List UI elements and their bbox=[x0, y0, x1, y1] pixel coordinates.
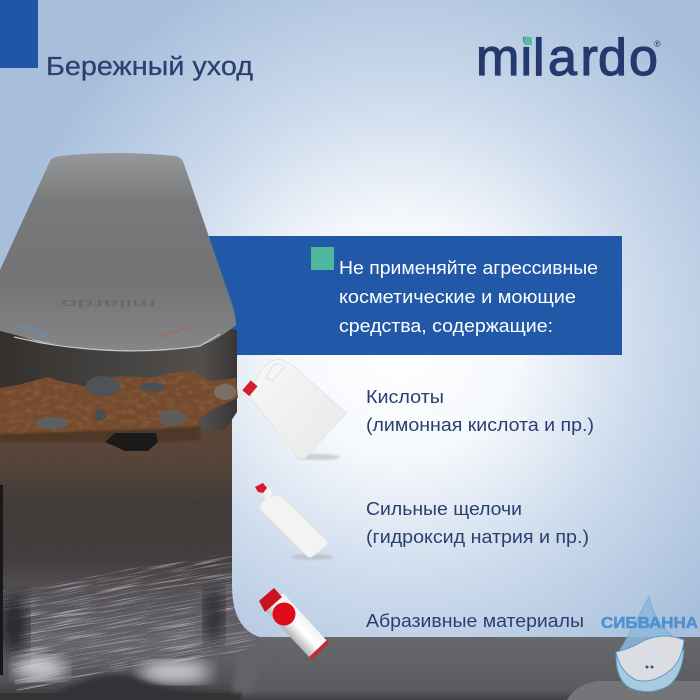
brown band under rust bbox=[0, 426, 200, 442]
warning text: средства, содержащие: bbox=[339, 315, 553, 336]
logo: milardo: ® bbox=[654, 39, 661, 49]
item text: alkalis: Сильные щелочи bbox=[366, 499, 522, 519]
faucet lower body bbox=[0, 420, 262, 700]
item text: acids: Кислоты bbox=[366, 387, 444, 407]
watermark: Сибванна: СИБВАННА bbox=[601, 615, 698, 632]
warning text: Не применяйте агрессивные bbox=[339, 257, 598, 278]
faucet handle bbox=[0, 153, 236, 351]
handle highlight bbox=[14, 334, 220, 351]
sink rounded edge bbox=[567, 681, 700, 700]
corner accent bbox=[0, 0, 38, 68]
logo: milardo: milardo bbox=[476, 29, 658, 87]
icon: bottle bbox=[255, 483, 333, 560]
cold mark bbox=[18, 325, 48, 335]
watermark: Сибванна bbox=[601, 597, 698, 692]
icon: green square bbox=[311, 247, 334, 270]
fade into base bbox=[232, 640, 270, 692]
dark slot bbox=[105, 433, 158, 451]
metal band bbox=[0, 328, 237, 430]
icon: canister bbox=[242, 360, 346, 460]
hot mark bbox=[160, 327, 190, 336]
item text: acids: (лимонная кислота и пр.) bbox=[366, 415, 594, 435]
item text: abrasives: Абразивные материалы bbox=[366, 611, 584, 631]
logo on handle: milardo bbox=[61, 297, 156, 309]
icon: tube bbox=[259, 588, 329, 660]
warning text: косметические и моющие bbox=[339, 286, 576, 307]
item text: alkalis: (гидроксид натрия и пр.) bbox=[366, 527, 589, 547]
rust band bbox=[0, 370, 240, 440]
sink base bbox=[235, 637, 700, 700]
faucet illustration bbox=[0, 153, 700, 700]
title: Бережный уход bbox=[46, 53, 253, 81]
panel: warning bbox=[209, 236, 622, 355]
